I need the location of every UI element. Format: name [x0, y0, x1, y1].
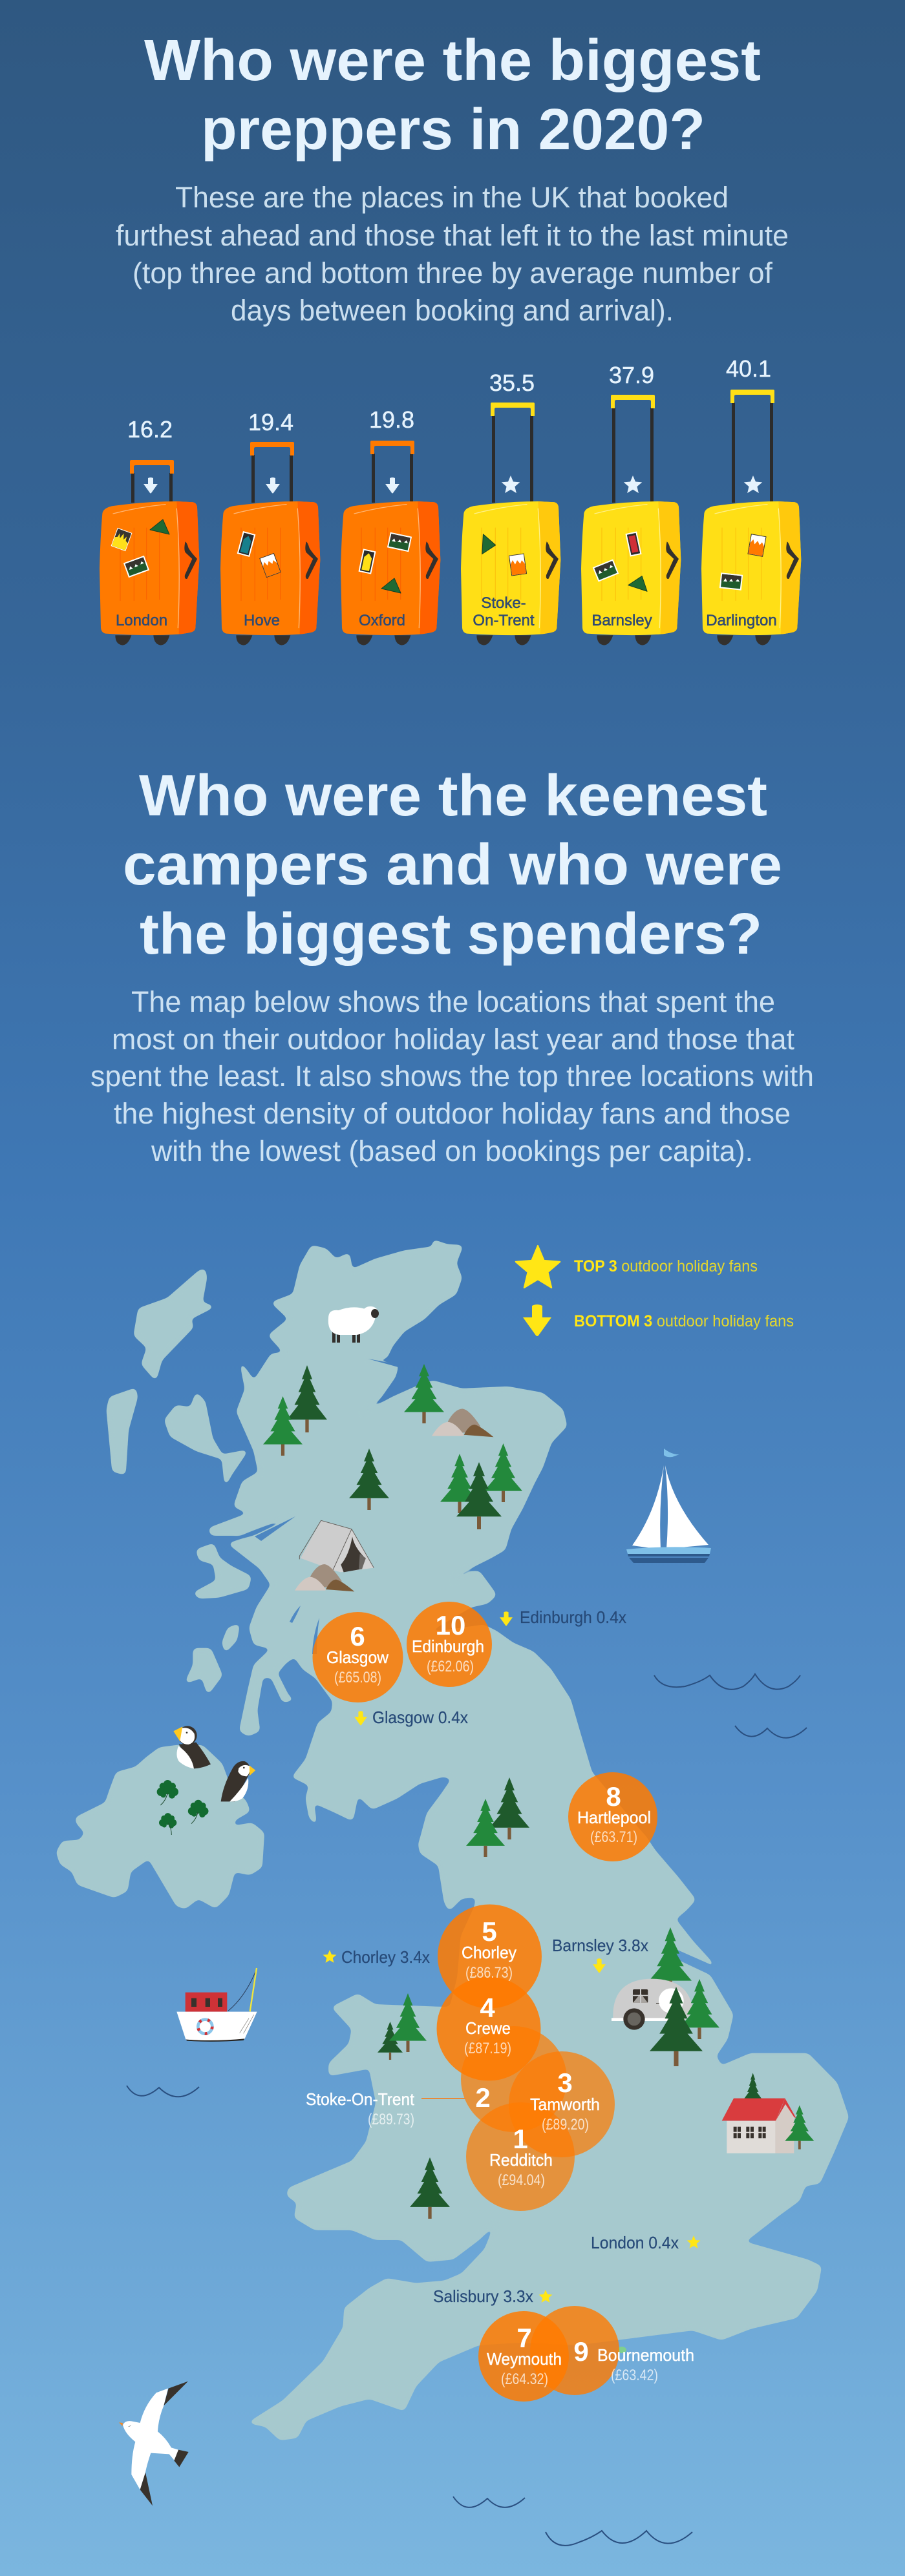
waves [127, 1674, 807, 2546]
puffin left [173, 1726, 211, 1768]
label: Redditch: Redditch [489, 2150, 553, 2170]
suitcase: Darlington 40.1: 40.1 [726, 355, 771, 382]
spend labels [306, 1610, 694, 2388]
label: Stoke-On-Trent [306, 2082, 491, 2128]
suitcase: Hove 19.4: 19.4 [248, 409, 293, 435]
suitcase: Hove 19.4: Hove [244, 612, 280, 629]
legend item: top 3: TOP 3 outdoor holiday fans [574, 1257, 758, 1275]
label: Glasgow [326, 1621, 389, 1686]
intro text: preppers: These are the places in the UK that booked [175, 181, 729, 214]
label: Tamworth: 3 [557, 2068, 573, 2098]
label: Weymouth [487, 2323, 562, 2388]
legend [516, 1246, 794, 1336]
suitcase: Barnsley 37.9 [581, 362, 681, 645]
label: Stoke-On-Trent: 2 [475, 2082, 491, 2113]
rocks beside tent [295, 1564, 354, 1591]
label: Glasgow: 6 [350, 1621, 365, 1651]
label: Chorley: 5 [482, 1916, 497, 1947]
suitcase: London 16.2: 16.2 [127, 416, 173, 443]
circle 8 Hartlepool [568, 1772, 657, 1861]
water inlets [255, 1359, 716, 1967]
circle 4 Crewe [437, 1977, 540, 2080]
label: Hartlepool: (£63.71) [590, 1828, 637, 1846]
label: Hartlepool: 8 [606, 1781, 621, 1812]
label: Edinburgh: Edinburgh [412, 1637, 484, 1656]
circle 2 Stoke-On-Trent [461, 2026, 567, 2132]
title: keenest campers: the biggest spenders? [140, 902, 762, 967]
icon: caravan with trees [612, 1927, 719, 2066]
legend item: bottom 3 [523, 1304, 794, 1336]
UK map landmass [56, 1240, 849, 2440]
title: biggest preppers [144, 28, 761, 162]
label: Edinburgh: 10 [436, 1610, 465, 1640]
fan density labels [323, 1607, 700, 2306]
fan label: Barnsley: Barnsley 3.8x [552, 1936, 648, 1955]
label: Edinburgh: (£62.06) [427, 1658, 474, 1675]
circle 6 Glasgow [313, 1612, 403, 1702]
suitcase: Stoke-On-Trent 35.5: On-Trent [473, 612, 535, 629]
suitcase: Stoke-On-Trent 35.5: 35.5 [489, 370, 535, 396]
suitcase: Barnsley 37.9: Barnsley [591, 612, 652, 629]
fan label: Chorley: Chorley 3.4x [341, 1947, 430, 1967]
intro text: preppers [116, 181, 789, 327]
title: keenest campers: Who were the keenest [139, 764, 767, 828]
fan label: Salisbury: Salisbury 3.3x [433, 2287, 533, 2306]
icon: sailing boat [626, 1449, 711, 1563]
label: Bournemouth [573, 2336, 694, 2384]
suitcase: London 16.2 [100, 416, 199, 645]
label: Glasgow: (£65.08) [334, 1669, 381, 1686]
intro text: map: spent the least. It also shows the top three locations with [90, 1060, 814, 1093]
spend circles [313, 1602, 657, 2402]
label: Bournemouth: (£63.42) [611, 2367, 658, 2384]
circle 9 Bournemouth [530, 2306, 619, 2395]
puffin right [221, 1761, 255, 1801]
icon: fishing boat [176, 1968, 257, 2042]
label: Redditch: (£94.04) [498, 2172, 545, 2189]
suitcase: London 16.2: London [116, 612, 167, 629]
trees: Scotland [263, 1364, 522, 1529]
label: Stoke-On-Trent: Stoke-On-Trent [306, 2089, 415, 2109]
intro text: preppers: furthest ahead and those that left it to the last minute [116, 219, 789, 252]
trees: northern England [466, 1777, 529, 1857]
label: Bournemouth: 9 [573, 2336, 589, 2367]
trees: Wales [378, 1993, 450, 2219]
label: Crewe: 4 [480, 1993, 495, 2023]
isle of wight patch [617, 2347, 626, 2353]
suitcase: Oxford 19.8 [341, 406, 440, 645]
label: Chorley: Chorley [462, 1943, 516, 1962]
intro text: map: with the lowest (based on bookings per capita). [151, 1135, 753, 1168]
intro text: map: most on their outdoor holiday last year and those that [112, 1023, 794, 1056]
suitcase: Oxford 19.8: 19.8 [369, 406, 414, 433]
label: Chorley [462, 1916, 516, 1982]
intro text: map: The map below shows the locations that spent the [131, 985, 775, 1018]
intro text: preppers: days between booking and arrival). [231, 294, 674, 327]
label: Stoke-On-Trent: (£89.73) [368, 2111, 414, 2128]
icon: sheep [328, 1306, 379, 1343]
intro text: map: the highest density of outdoor holiday fans and those [114, 1097, 791, 1130]
suitcase: Darlington 40.1 [701, 355, 801, 645]
label: Weymouth: Weymouth [487, 2349, 562, 2369]
suitcase: Darlington 40.1: Darlington [706, 612, 777, 629]
label: Tamworth: (£89.20) [542, 2116, 589, 2133]
icon: rocks Highlands [432, 1408, 494, 1437]
intro text: preppers: (top three and bottom three by average number of [133, 257, 772, 289]
icon: seagull [119, 2382, 189, 2506]
icon: tent [295, 1520, 374, 1591]
suitcase: Stoke-On-Trent 35.5 [461, 370, 560, 645]
title: keenest campers [123, 764, 782, 967]
label: Redditch: 1 [513, 2124, 528, 2154]
label: Weymouth: (£64.32) [501, 2371, 548, 2388]
suitcase: Stoke-On-Trent 35.5: Stoke- [481, 594, 526, 612]
legend item: top 3 [516, 1246, 758, 1288]
circle 3 Tamworth [509, 2051, 615, 2157]
suitcase chart [100, 355, 801, 645]
label: Bournemouth: Bournemouth [597, 2345, 694, 2365]
fan label: Edinburgh: Edinburgh 0.4x [520, 1607, 626, 1627]
label: Hartlepool [577, 1781, 651, 1846]
label: Hartlepool: Hartlepool [577, 1808, 651, 1827]
icon: puffins and shamrocks [157, 1726, 255, 1835]
icon: house with trees [722, 2073, 814, 2153]
label: Redditch [489, 2124, 553, 2189]
shamrocks [157, 1780, 208, 1835]
circle 10 Edinburgh [407, 1602, 492, 1687]
suitcase: Hove 19.4 [220, 409, 320, 645]
circle 5 Chorley [438, 1905, 542, 2008]
title: biggest preppers: Who were the biggest [144, 28, 761, 93]
circle 7 Weymouth [478, 2311, 569, 2402]
label: Tamworth: Tamworth [530, 2095, 600, 2114]
intro text: map [90, 985, 814, 1168]
label: Crewe [464, 1993, 511, 2057]
label: Crewe: (£87.19) [464, 2040, 511, 2057]
label: Weymouth: 7 [516, 2323, 532, 2353]
label: Edinburgh [412, 1610, 484, 1675]
title: biggest preppers: preppers in 2020? [201, 98, 705, 162]
fan label: London: London 0.4x [591, 2233, 679, 2252]
circle 1 Redditch [466, 2102, 575, 2211]
label: Glasgow: Glasgow [326, 1648, 389, 1667]
suitcase: Oxford 19.8: Oxford [359, 612, 405, 629]
legend item: bottom 3: BOTTOM 3 outdoor holiday fans [574, 1312, 794, 1330]
title: keenest campers: campers and who were [123, 833, 782, 897]
label: Tamworth [530, 2068, 600, 2133]
label: Chorley: (£86.73) [465, 1964, 513, 1982]
fan label: Barnsley [552, 1936, 648, 1973]
fan label: Glasgow: Glasgow 0.4x [372, 1708, 468, 1727]
suitcase: Barnsley 37.9: 37.9 [609, 362, 654, 388]
label: Crewe: Crewe [465, 2018, 511, 2038]
